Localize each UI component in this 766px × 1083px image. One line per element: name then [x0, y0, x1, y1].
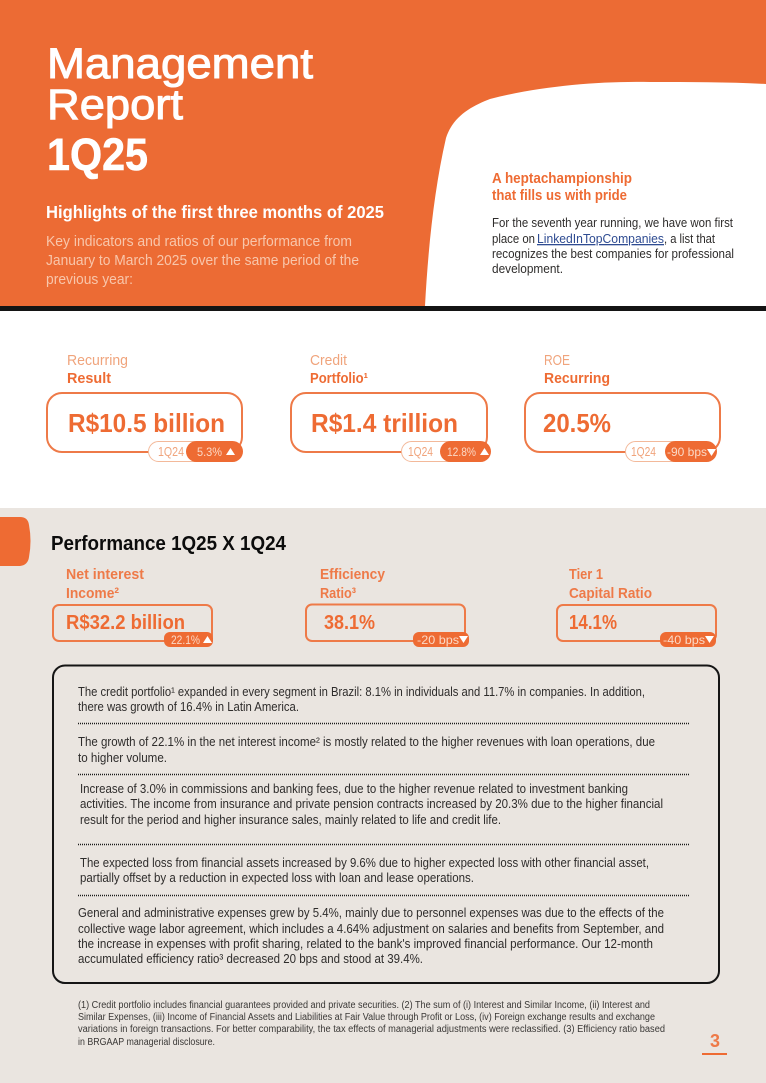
KPI: tier 1 capital ratio: Tier 1	[569, 566, 603, 583]
KPI: efficiency ratio: Ratio³	[320, 585, 356, 602]
text: commissions and insurance: activities. The income from insurance and private pension contracts increased by 20.3% due to the higher financial	[80, 796, 663, 811]
KPI: credit portfolio	[291, 352, 491, 462]
text: administrative expenses: collective wage labor agreement, which includes a 4.64% adjustment on salaries and benefits from September, and	[78, 921, 664, 936]
KPI: ROE recurring: -90 bps	[667, 445, 707, 459]
text: commissions and insurance: Increase of 3.0% in commissions and banking fees, due to the higher revenue related to investment banking	[80, 781, 628, 796]
footnotes: in BRGAAP managerial disclosure.	[78, 1037, 215, 1048]
KPI: efficiency ratio: 38.1%	[324, 612, 375, 634]
KPI: recurring result	[47, 352, 243, 462]
KPI: ROE recurring: Recurring	[544, 371, 610, 387]
panel: performance section	[0, 508, 766, 1083]
KPI: efficiency ratio: -20 bps	[417, 633, 459, 647]
KPI: efficiency ratio: Efficiency	[320, 566, 386, 583]
KPI: credit portfolio: Credit	[310, 352, 348, 369]
text: credit portfolio: there was growth of 16.4% in Latin America.	[78, 699, 299, 714]
KPI: recurring result: R$10.5 billion	[68, 408, 225, 438]
text: commissions and insurance	[80, 781, 663, 827]
intro text	[46, 233, 359, 288]
text: net interest income: The growth of 22.1% in the net interest income² is mostly related to the higher revenues with loan operations, due	[78, 734, 655, 749]
black rule under header	[0, 306, 766, 311]
callout heading: that fills us with pride	[492, 187, 627, 204]
footnotes: variations in foreign transactions. For better comparability, the tax effects of managerial adjustments were reclassified. (3) Efficiency ratio based	[78, 1024, 665, 1035]
KPI: efficiency ratio	[306, 566, 469, 647]
subtitle: Highlights of the first three months of 2025	[46, 202, 384, 222]
KPI: credit portfolio: Portfolio¹	[310, 371, 368, 387]
white curved callout area	[425, 82, 766, 306]
KPI: recurring result: 1Q24	[158, 445, 184, 459]
panel: header	[0, 0, 766, 311]
text: administrative expenses: accumulated efficiency ratio³ decreased 20 bps and stood at 39.4%.	[78, 951, 423, 966]
text: commissions and insurance: result for the period and higher insurance sales, mainly related to life and credit life.	[80, 812, 501, 827]
intro text: previous year:	[46, 271, 133, 288]
text: net interest income	[78, 734, 655, 765]
intro text: January to March 2025 over the same period of the	[46, 252, 359, 269]
callout text: recognizes the best companies for professional	[492, 246, 734, 261]
callout heading	[492, 170, 632, 204]
KPI: ROE recurring: 20.5%	[543, 408, 611, 438]
KPI: recurring result: 5.3%	[197, 445, 222, 459]
KPI: net interest income: Income²	[66, 585, 119, 602]
callout text: development.	[492, 261, 563, 276]
intro text: Key indicators and ratios of our performance from	[46, 233, 352, 250]
KPI: recurring result: Recurring	[67, 352, 128, 369]
KPI: net interest income: Net interest	[66, 566, 144, 583]
text: credit portfolio: The credit portfolio¹ expanded in every segment in Brazil: 8.1% in individuals and 11.7% in companies. In addition,	[78, 684, 645, 699]
title	[47, 40, 313, 180]
KPI: ROE recurring: ROE	[544, 352, 570, 369]
text: administrative expenses: General and administrative expenses grew by 5.4%, mainly due to personnel expenses was due to the effects of the	[78, 905, 664, 920]
footnotes	[78, 1000, 665, 1048]
KPI: tier 1 capital ratio: Capital Ratio	[569, 585, 652, 602]
KPI: credit portfolio: 12.8%	[447, 445, 476, 459]
title: Management	[47, 40, 313, 88]
KPI: net interest income	[53, 566, 213, 647]
callout heading: A heptachampionship	[492, 170, 632, 187]
KPI: net interest income: R$32.2 billion	[66, 612, 185, 634]
text: credit portfolio	[78, 684, 645, 714]
text: expected loss: partially offset by a reduction in expected loss with loan and lease operations.	[80, 870, 474, 885]
KPI: recurring result: Result	[67, 371, 111, 387]
title: Report	[47, 81, 183, 129]
text: expected loss	[80, 855, 649, 885]
text: net interest income: to higher volume.	[78, 750, 167, 765]
section heading: Performance 1Q25 X 1Q24	[51, 533, 287, 555]
callout text	[492, 215, 734, 276]
text: expected loss: The expected loss from financial assets increased by 9.6% due to higher expected loss with other financial asset,	[80, 855, 649, 870]
callout text: , a list that	[664, 231, 715, 246]
callout text: LinkedInTopCompanies	[537, 231, 664, 246]
KPI: ROE recurring: 1Q24	[631, 445, 656, 459]
title: 1Q25	[47, 129, 148, 180]
callout text: For the seventh year running, we have won first	[492, 215, 733, 230]
KPI: tier 1 capital ratio: -40 bps	[663, 633, 705, 647]
KPI: credit portfolio: 1Q24	[408, 445, 433, 459]
KPI: tier 1 capital ratio	[557, 566, 716, 647]
page number: 3	[710, 1031, 720, 1051]
page number	[702, 1031, 727, 1055]
icon: orange side tab	[0, 517, 30, 566]
KPI: credit portfolio: R$1.4 trillion	[311, 408, 458, 438]
KPI: net interest income: 22.1%	[171, 633, 200, 647]
callout text: place on	[492, 231, 535, 246]
panel: commentary box	[53, 666, 719, 983]
KPI: tier 1 capital ratio: 14.1%	[569, 612, 617, 634]
text: administrative expenses: the increase in expenses with profit sharing, related to the bank's improved financial performance. Our 12-month	[78, 936, 653, 951]
KPI: ROE recurring	[525, 352, 720, 462]
footnotes: Similar Expenses, (iii) Income of Financial Assets and Liabilities at Fair Value through Profit or Loss, (iv) Foreign exchange results and exchange	[78, 1012, 655, 1023]
text: administrative expenses	[78, 905, 664, 966]
footnotes: (1) Credit portfolio includes financial guarantees provided and private securities. (2) The sum of (i) Interest and Similar Income, (ii) Interest and	[78, 1000, 650, 1011]
